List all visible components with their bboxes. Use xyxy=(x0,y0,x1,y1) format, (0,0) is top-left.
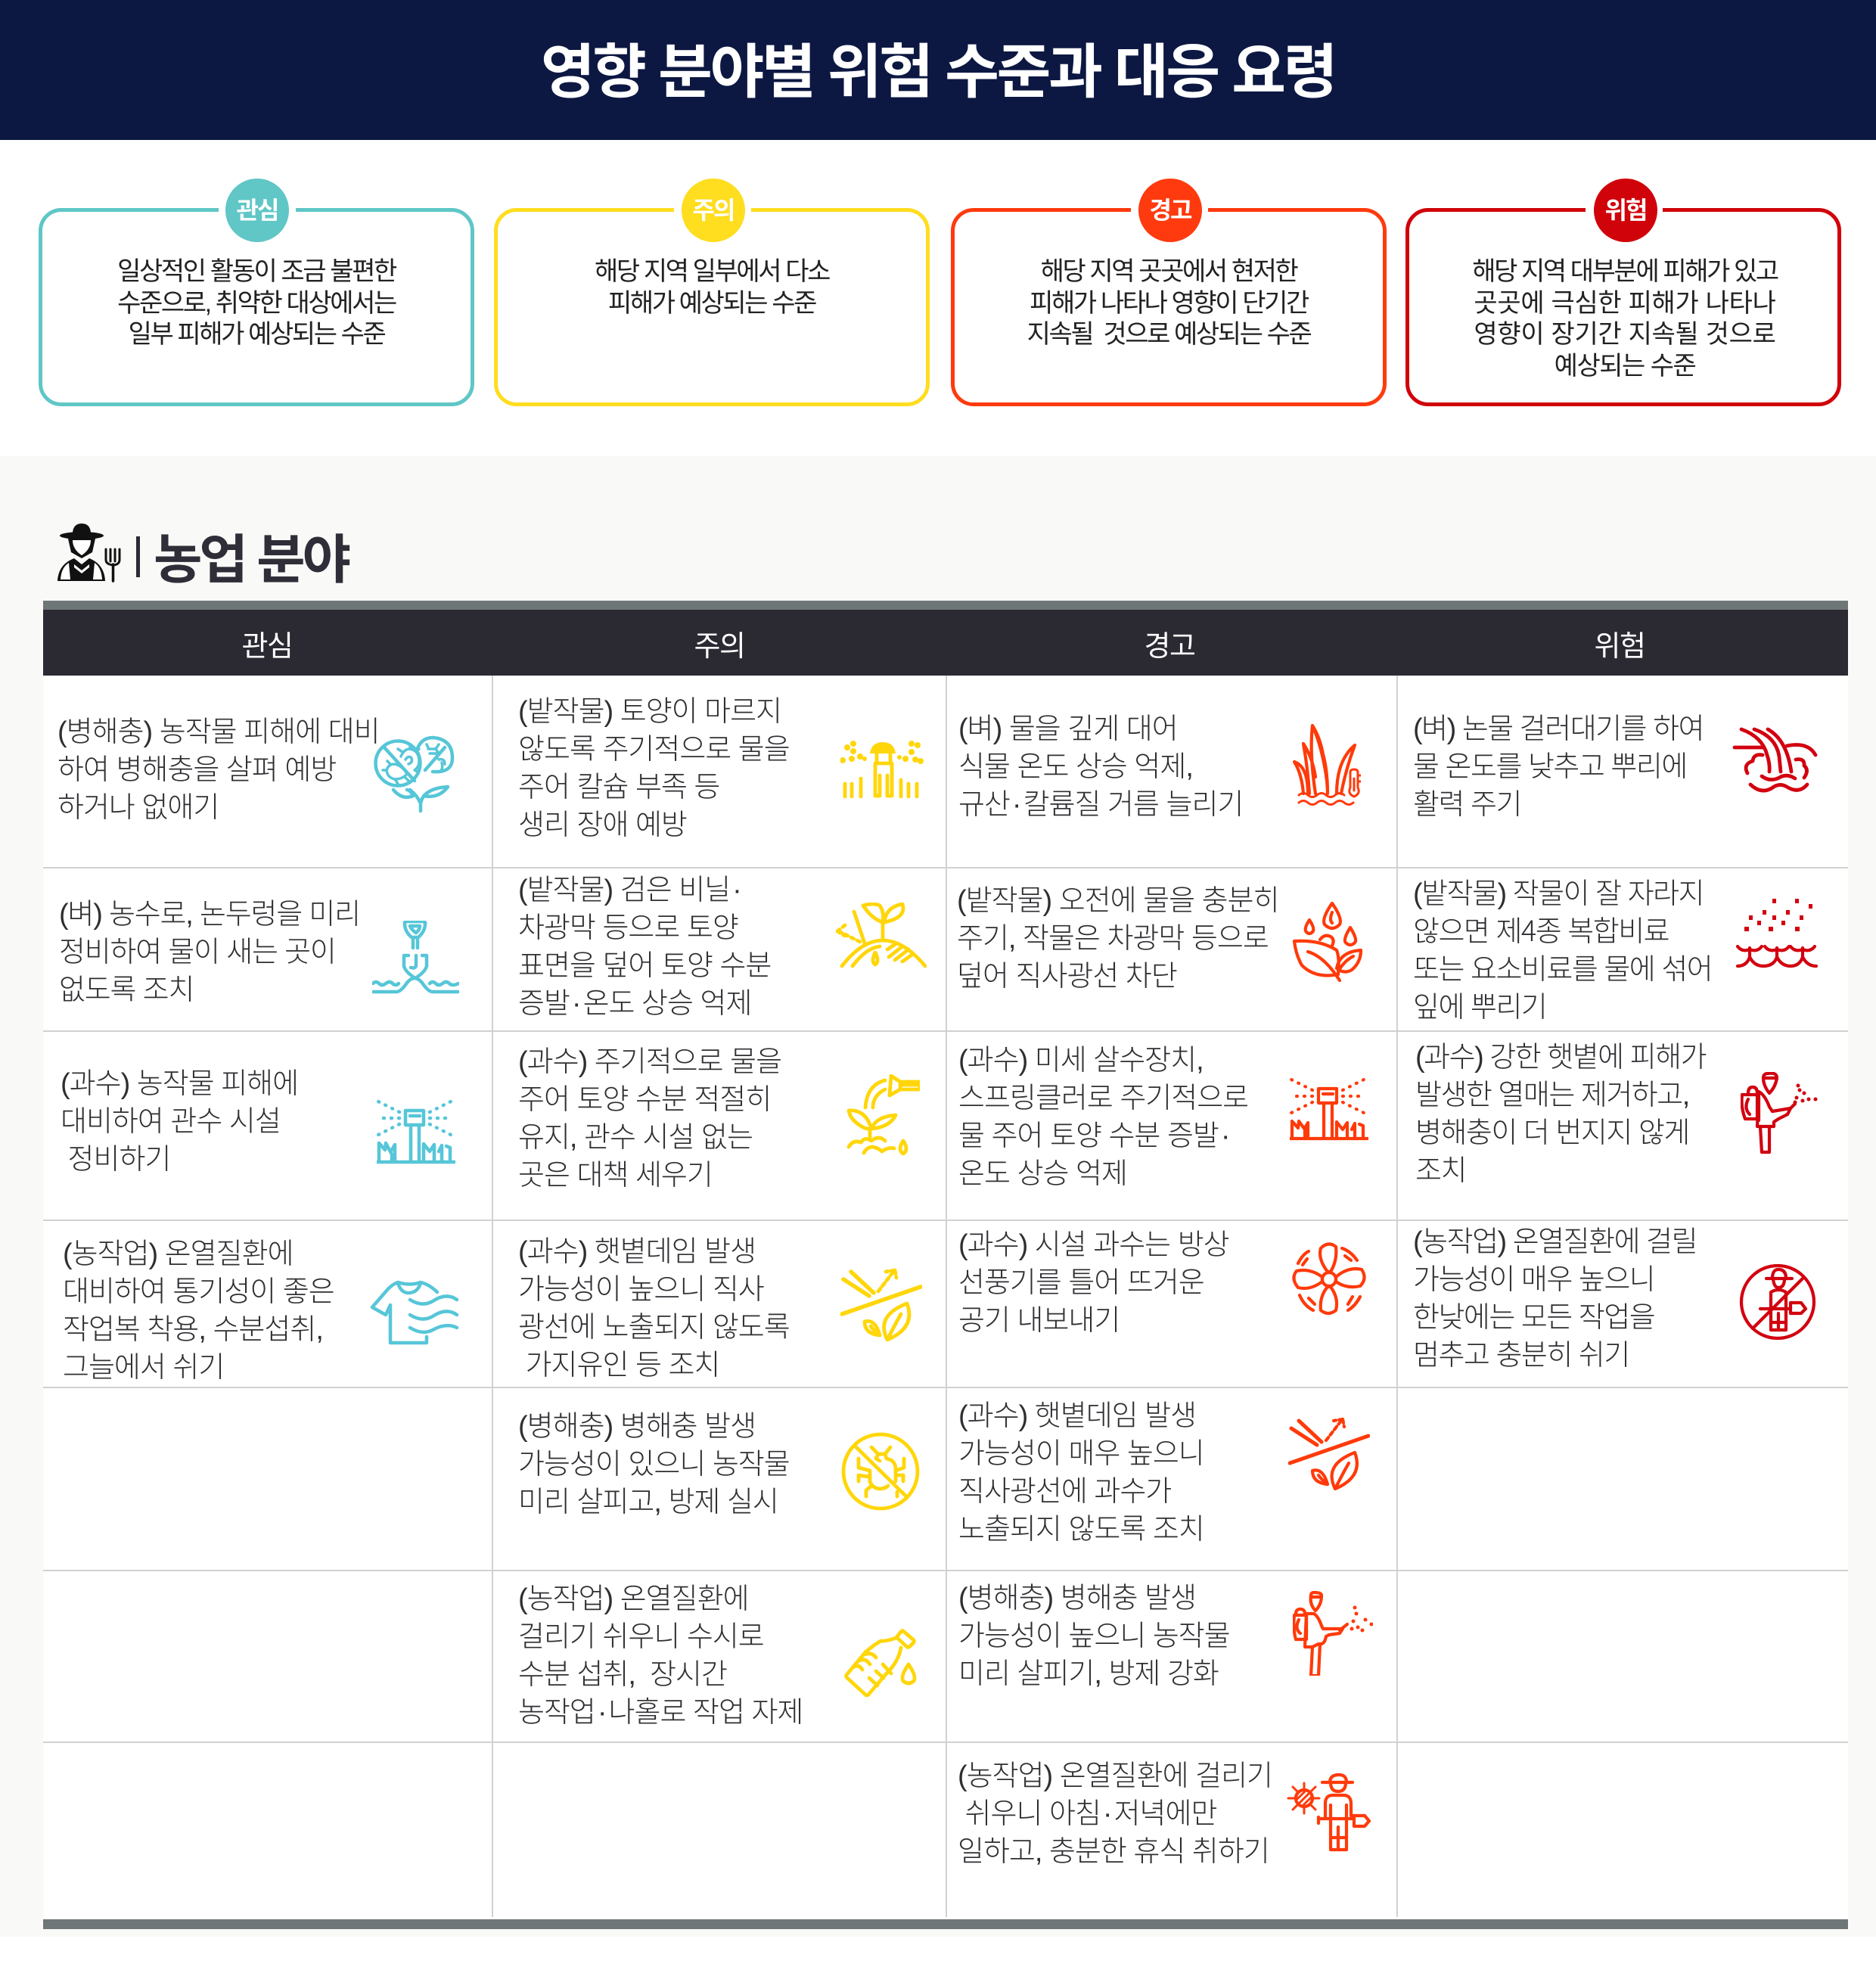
badge 관심: 관심 xyxy=(237,197,278,224)
title banner xyxy=(0,0,1876,140)
panel: level 관심 xyxy=(39,179,474,406)
description 위험: 해당 지역 대부분에 피해가 있고 곳곳에 극심한 피해가 나타나 영향이 장기간 지속될 것으로 예상되는 수준 xyxy=(1472,257,1778,380)
text: 위험 row 1: (벼) 논물 걸러대기를 하여 물 온도를 낮추고 뿌리에 활력 주기 xyxy=(1413,713,1704,821)
icon: fertilizer on sprouts xyxy=(1736,899,1818,968)
icon: yellow sprinkler with droplets xyxy=(840,741,924,798)
icon: sprout on covered mound xyxy=(836,903,927,968)
icon: sprinkler xyxy=(377,1100,455,1164)
icon: no bugs xyxy=(841,1433,920,1510)
text: 주의 row 2: (밭작물) 검은 비닐· 차광막 등으로 토양 표면을 덮어 토양 수분 증발·온도 상승 억제 xyxy=(518,875,771,1020)
text: 관심 row 3: (과수) 농작물 피해에 대비하여 관수 시설 정비하기 xyxy=(61,1068,298,1176)
icon: yellow sunburn leaf xyxy=(840,1268,922,1341)
icon: shovel and levee xyxy=(372,921,459,994)
icon: ventilated shirt xyxy=(371,1280,458,1345)
text: 주의 row 3: (과수) 주기적으로 물을 주어 토양 수분 적절히 유지, 관수 시설 없는 곳은 대책 세우기 xyxy=(518,1046,781,1192)
icon: no working xyxy=(1740,1263,1815,1341)
panel: level 주의 xyxy=(494,179,930,406)
header cell 주의: 주의 xyxy=(694,631,744,663)
icon: hose watering plant xyxy=(847,1074,920,1156)
panel: level 위험 xyxy=(1405,179,1841,406)
card frame 경고 xyxy=(951,208,1387,406)
text: 주의 row 1: (밭작물) 토양이 마르지 않도록 주기적으로 물을 주어 칼슘 부족 등 생리 장애 예방 xyxy=(518,696,790,841)
text: 경고 row 1: (벼) 물을 깊게 대어 식물 온도 상승 억제, 규산·칼륨질 거름 늘리기 xyxy=(958,713,1243,821)
description 관심: 일상적인 활동이 조금 불편한 수준으로, 취약한 대상에서는 일부 피해가 예상되는 수준 xyxy=(117,257,396,349)
badge 관심 xyxy=(225,179,289,242)
icon: red sunburn leaf xyxy=(1288,1418,1370,1490)
icon: crossed pests with sprout xyxy=(374,735,454,813)
text: 관심 row 2: (벼) 농수로, 논두렁을 미리 정비하여 물이 새는 곳이 없도록 조치 xyxy=(59,899,360,1006)
heading divider bar xyxy=(136,536,140,577)
icon: person spraying pesticide xyxy=(1293,1591,1373,1676)
badge 경고 xyxy=(1138,179,1202,242)
text: 경고 row 3: (과수) 미세 살수장치, 스프링클러로 주기적으로 물 주어 토양 수분 증발· 온도 상승 억제 xyxy=(958,1045,1248,1190)
icon: red sprinkler xyxy=(1290,1078,1368,1141)
text: 주의 row 6: (농작업) 온열질환에 걸리기 쉬우니 수시로 수분 섭취, 장시간 농작업·나홀로 작업 자제 xyxy=(518,1583,803,1729)
table frame with white body xyxy=(43,610,1848,1919)
text: 주의 row 4: (과수) 햇볕데임 발생 가능성이 높으니 직사 광선에 노출되지 않도록 가지유인 등 조치 xyxy=(518,1236,790,1381)
text: 관심 row 1: (병해충) 농작물 피해에 대비 하여 병해충을 살펴 예방 하거나 없애기 xyxy=(57,716,380,824)
text: 경고 row 5: (과수) 햇볕데임 발생 가능성이 매우 높으니 직사광선에 과수가 노출되지 않도록 조치 xyxy=(958,1400,1204,1546)
icon: grass with thermometer xyxy=(1293,724,1361,806)
text: 경고 row 6: (병해충) 병해충 발생 가능성이 높으니 농작물 미리 살피기, 방제 강화 xyxy=(958,1583,1230,1690)
badge 경고: 경고 xyxy=(1150,197,1191,224)
panel: agriculture section background xyxy=(0,456,1876,1937)
header cell 관심: 관심 xyxy=(242,631,292,663)
icon: drops and leaves xyxy=(1293,902,1362,982)
icon: worker with sun xyxy=(1287,1773,1371,1852)
header cell 위험: 위험 xyxy=(1595,631,1645,663)
badge 주의: 주의 xyxy=(693,197,734,224)
text: 위험 row 3: (과수) 강한 햇볕에 피해가 발생한 열매는 제거하고, 병해충이 더 번지지 않게 조치 xyxy=(1415,1042,1706,1187)
text: 주의 row 5: (병해충) 병해충 발생 가능성이 있으니 농작물 미리 살피고, 방제 실시 xyxy=(518,1411,790,1518)
text: 경고 row 2: (밭작물) 오전에 물을 충분히 주기, 작물은 차광막 등으로 덮어 직사광선 차단 xyxy=(957,885,1279,993)
description 경고: 해당 지역 곳곳에서 현저한 피해가 나타나 영향이 단기간 지속될 것으로 예상되는 수준 xyxy=(1027,257,1310,349)
badge 위험 xyxy=(1594,179,1657,242)
heading: 농업 분야: 농업 분야 xyxy=(154,530,348,589)
icon: water bottle xyxy=(844,1629,917,1698)
table bottom rule xyxy=(43,1919,1848,1929)
icon: farmer with fork xyxy=(57,524,121,583)
table header row xyxy=(43,610,1848,676)
icon: rice paddy water xyxy=(1732,728,1817,793)
text: 경고 row 4: (과수) 시설 과수는 방상 선풍기를 틀어 뜨거운 공기 내보내기 xyxy=(958,1229,1229,1337)
title banner: 영향 분야별 위험 수준과 대응 요령 xyxy=(541,39,1335,105)
icon: person spraying xyxy=(1741,1072,1817,1154)
card frame 위험 xyxy=(1405,208,1841,406)
text: 경고 row 7: (농작업) 온열질환에 걸리기 쉬우니 아침·저녁에만 일하고, 충분한 휴식 취하기 xyxy=(958,1760,1272,1868)
badge 위험: 위험 xyxy=(1605,197,1646,224)
text: 관심 row 4: (농작업) 온열질환에 대비하여 통기성이 좋은 작업복 착용, 수분섭취, 그늘에서 쉬기 xyxy=(63,1238,334,1384)
icon: fan xyxy=(1292,1242,1366,1315)
text: 위험 row 2: (밭작물) 작물이 잘 자라지 않으면 제4종 복합비료 또는 요소비료를 물에 섞어 잎에 뿌리기 xyxy=(1413,878,1712,1024)
panel: level 경고 xyxy=(951,179,1387,406)
card frame 주의 xyxy=(494,208,930,406)
text: 위험 row 4: (농작업) 온열질환에 걸릴 가능성이 매우 높으니 한낮에는 모든 작업을 멈추고 충분히 쉬기 xyxy=(1413,1226,1697,1372)
table top rule xyxy=(43,601,1848,610)
description 주의: 해당 지역 일부에서 다소 피해가 예상되는 수준 xyxy=(595,257,829,318)
card frame 관심 xyxy=(39,208,474,406)
header cell 경고: 경고 xyxy=(1145,631,1194,663)
badge 주의 xyxy=(682,179,745,242)
